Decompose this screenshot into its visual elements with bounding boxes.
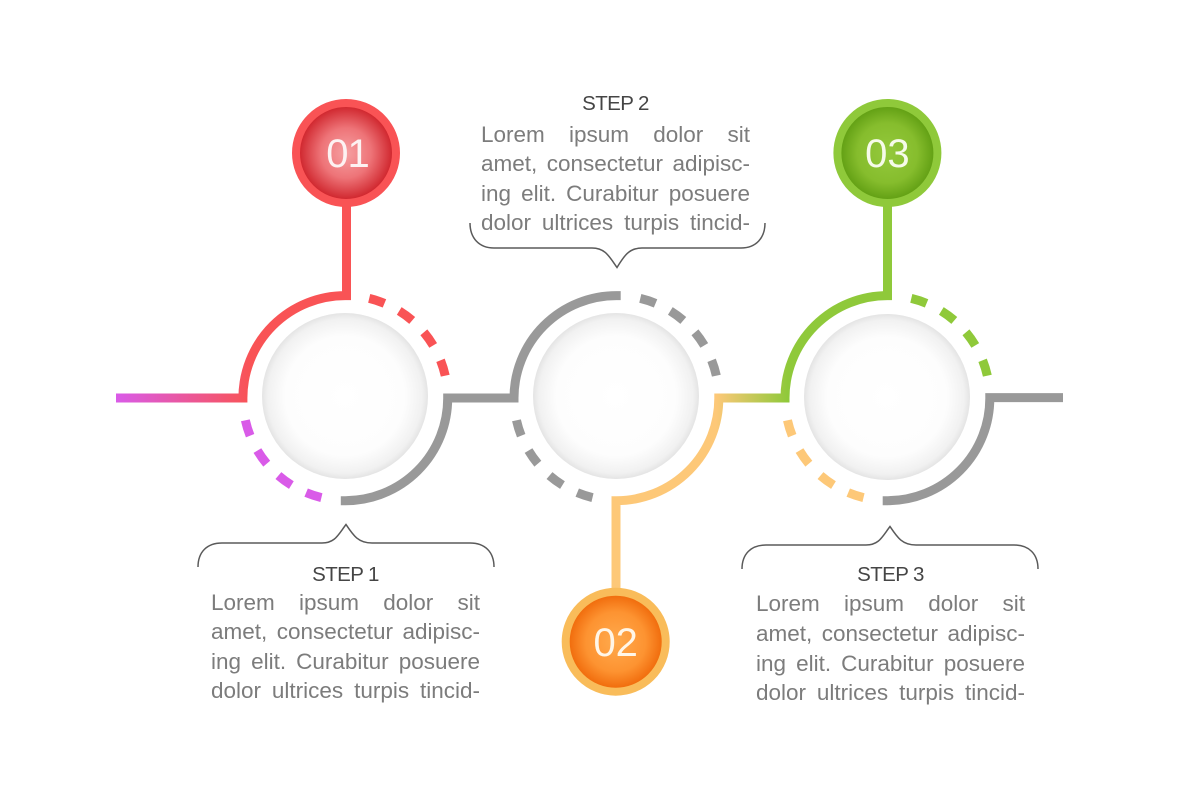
badge 01 [296, 103, 396, 203]
dashed arc: circle 2 upper right [640, 298, 717, 377]
dashed arc: circle 3 upper right [911, 298, 988, 377]
body text: step 2: Lorem ipsum dolor sit [481, 122, 750, 147]
badge 01: 01 [326, 132, 369, 176]
dashed arc: circle 2 lower left [516, 419, 592, 498]
sphere 1 [262, 313, 428, 479]
text block: step 3 [756, 563, 1025, 705]
body text: step 3 [756, 591, 1025, 705]
body text: step 3: amet, consectetur adipisc- [756, 621, 1025, 646]
badge 02 [566, 592, 666, 692]
body text: step 2 [481, 122, 750, 235]
body text: step 3: Lorem ipsum dolor sit [756, 591, 1025, 616]
connector: orange to green line with stems to badges 02 and 03 [616, 205, 888, 590]
body text: step 3: ing elit. Curabitur posuere [756, 651, 1025, 676]
body text: step 3: dolor ultrices turpis tincid- [756, 680, 1025, 705]
brace: step 3 [742, 526, 1038, 569]
badge 02: 02 [593, 621, 638, 665]
body text: step 2: ing elit. Curabitur posuere [481, 181, 750, 206]
dashed arc: circle 3 lower left [787, 419, 864, 498]
badge 03 [837, 103, 937, 203]
brace: step 2 [470, 223, 765, 268]
badge 03: 03 [865, 132, 910, 176]
body text: step 1: ing elit. Curabitur posuere [211, 649, 480, 674]
heading: step 3: STEP 3 [857, 563, 924, 586]
body text: step 2: dolor ultrices turpis tincid- [481, 210, 750, 235]
body text: step 1: dolor ultrices turpis tincid- [211, 678, 480, 703]
body text: step 1: amet, consectetur adipisc- [211, 619, 480, 644]
connector: purple to red line with stem to badge 01 [116, 205, 346, 398]
connector: gray exit line [883, 398, 1063, 501]
body text: step 1 [211, 590, 480, 703]
text block: step 2 [481, 92, 750, 235]
dashed arc: circle 1 lower left [245, 419, 321, 498]
heading: step 2: STEP 2 [582, 92, 649, 115]
brace: step 1 [198, 524, 494, 567]
sphere 3 [804, 314, 970, 480]
dashed arc: circle 1 upper right [369, 298, 446, 377]
text block: step 1 [211, 563, 480, 703]
connector: gray line from circle 1 to circle 2 [341, 296, 621, 501]
body text: step 2: amet, consectetur adipisc- [481, 151, 750, 176]
heading: step 1: STEP 1 [312, 563, 379, 586]
body text: step 1: Lorem ipsum dolor sit [211, 590, 480, 615]
sphere 2 [533, 313, 699, 479]
